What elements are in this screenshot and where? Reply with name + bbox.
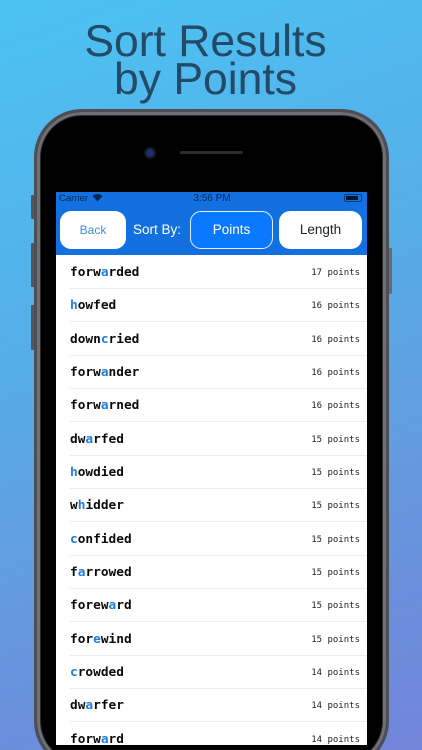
row: howdied	[70, 465, 360, 480]
row: dwarfed: 15 points	[311, 435, 360, 445]
phone body	[34, 109, 389, 750]
icon: wifi	[92, 194, 102, 202]
points button, selected: Points	[213, 222, 250, 237]
row: dwarfer: dwarfer	[70, 698, 124, 713]
app header bar	[56, 192, 367, 255]
screen	[56, 192, 367, 745]
row: downcried	[70, 332, 360, 347]
row: crowded: crowded	[70, 665, 124, 680]
row: downcried: 16 points	[311, 335, 360, 345]
row: howfed	[70, 298, 360, 313]
row: forward: 14 points	[311, 735, 360, 745]
row: forewind	[70, 632, 360, 647]
row: howfed: howfed	[70, 298, 116, 313]
row: forwarned: forwarned	[70, 398, 139, 413]
row: howdied: howdied	[70, 465, 124, 480]
row: forwarded: 17 points	[311, 268, 360, 278]
row: farrowed: 15 points	[311, 568, 360, 578]
row: forwarded: forwarded	[70, 265, 139, 280]
row: forward	[70, 732, 360, 745]
row: confided	[70, 532, 360, 547]
row: crowded: 14 points	[311, 668, 360, 678]
row: forwarded	[70, 265, 360, 280]
row: foreward	[70, 598, 360, 613]
row: forewind: forewind	[70, 632, 132, 647]
icon: phone side buttons	[31, 195, 392, 350]
row: farrowed	[70, 565, 360, 580]
row: forwander: forwander	[70, 365, 139, 380]
row: whidder: whidder	[70, 498, 124, 513]
row: forwarned: 16 points	[311, 401, 360, 411]
row: howfed: 16 points	[311, 301, 360, 311]
icon: speaker	[180, 151, 243, 154]
points button, selected	[190, 211, 273, 249]
row: forwarned	[70, 398, 360, 413]
row: forwander	[70, 365, 360, 380]
status bar carrier: Carrier	[59, 193, 88, 204]
row: crowded	[70, 665, 360, 680]
title: by Points	[114, 55, 297, 104]
icon: front camera	[146, 149, 154, 157]
row: forewind: 15 points	[311, 635, 360, 645]
length button: Length	[300, 222, 341, 237]
row: dwarfed: dwarfed	[70, 432, 124, 447]
row: farrowed: farrowed	[70, 565, 132, 580]
row: dwarfer	[70, 698, 360, 713]
row: dwarfed	[70, 432, 360, 447]
row: dwarfer: 14 points	[311, 701, 360, 711]
row: confided: confided	[70, 532, 132, 547]
status bar time: 3:56 PM	[193, 193, 231, 204]
results list	[56, 255, 367, 745]
row: confided: 15 points	[311, 535, 360, 545]
title	[84, 17, 327, 104]
back button: Back	[80, 223, 106, 237]
row: forwander: 16 points	[311, 368, 360, 378]
row: foreward: foreward	[70, 598, 132, 613]
row: downcried: downcried	[70, 332, 139, 347]
row: whidder	[70, 498, 360, 513]
back button	[60, 211, 126, 249]
length button	[279, 211, 362, 249]
icon: battery	[344, 194, 362, 202]
row: foreward: 15 points	[311, 601, 360, 611]
row: whidder: 15 points	[311, 501, 360, 511]
sort by label: Sort By:	[133, 222, 181, 237]
row: howdied: 15 points	[311, 468, 360, 478]
title: Sort Results	[84, 17, 327, 66]
